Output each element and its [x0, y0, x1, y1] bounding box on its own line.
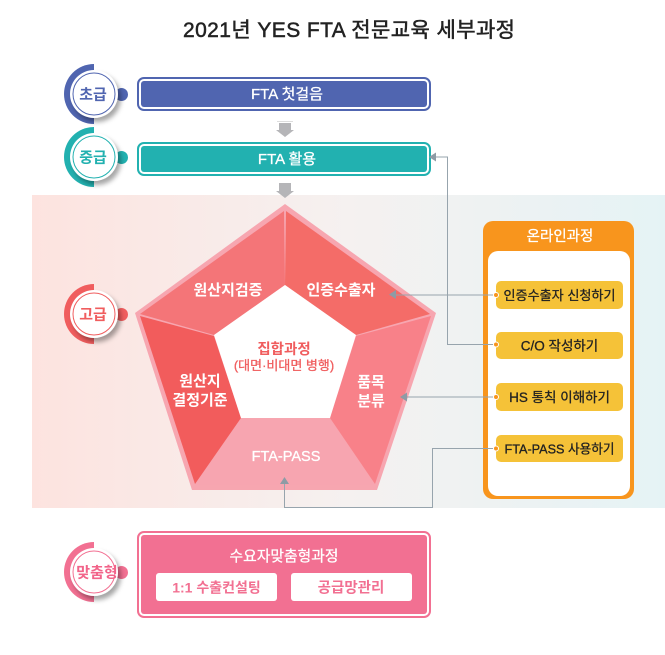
center: group course: 집합과정 [257, 341, 311, 358]
background band: advanced level [32, 195, 665, 508]
panel: online course: 온라인과정 [527, 228, 593, 245]
segment: origin criteria: 원산지 [179, 373, 221, 390]
item: apply approved exporter [496, 281, 623, 309]
badge: beginner [64, 64, 128, 124]
segment: item classification [330, 316, 431, 484]
bar: FTA first steps [138, 78, 430, 110]
bar: FTA application [138, 143, 430, 175]
button: supply chain management [291, 573, 412, 601]
item: write C/O: C/O 작성하기 [521, 338, 598, 354]
title: 2021년 YES FTA 전문교육 세부과정 [183, 19, 515, 42]
arrow: FTA-PASS use to segment [280, 446, 498, 508]
segment: origin verification [140, 211, 285, 335]
pentagon diagram [135, 204, 436, 490]
bar: FTA first steps: FTA 첫걸음 [251, 86, 323, 103]
arrow: C/O to FTA application [429, 152, 498, 347]
panel: customized course [138, 532, 430, 617]
arrow: beginner to intermediate [276, 121, 294, 137]
segment: item classification: 품목 [357, 374, 385, 391]
badge: intermediate: 중급 [79, 150, 107, 166]
badge: intermediate [64, 127, 128, 187]
segment: origin criteria: 결정기준 [172, 392, 228, 409]
item: understand HS [496, 383, 623, 411]
item: use FTA-PASS: FTA-PASS 사용하기 [504, 442, 614, 456]
badge: advanced [64, 284, 128, 344]
badge: advanced: 고급 [79, 306, 107, 324]
center: group course [214, 285, 356, 418]
item: write C/O [496, 332, 623, 359]
arrow: exporter application to segment [389, 290, 498, 299]
bar: FTA application: FTA 활용 [258, 151, 316, 168]
segment: origin verification: 원산지검증 [193, 282, 263, 299]
segment: FTA-PASS [195, 419, 375, 485]
arrow: HS to item classification [400, 392, 498, 402]
panel: customized course: 수요자맞춤형과정 [230, 548, 338, 565]
badge: customized [64, 542, 128, 602]
panel: online course [483, 221, 634, 499]
arrow: intermediate to advanced [276, 183, 294, 198]
segment: item classification: 분류 [357, 393, 385, 410]
segment: origin criteria [140, 316, 241, 484]
badge: customized: 맞춤형 [76, 564, 118, 582]
button: supply chain management: 공급망관리 [318, 580, 384, 596]
item: apply approved exporter: 인증수출자 신청하기 [504, 288, 616, 303]
item: understand HS: HS 통칙 이해하기 [509, 390, 610, 405]
button: 1:1 export consulting [156, 573, 277, 601]
button: 1:1 export consulting: 1:1 수출컨설팅 [172, 580, 261, 596]
segment: approved exporter [285, 211, 430, 335]
center: group course: (대면·비대면 병행) [234, 358, 334, 373]
badge: beginner: 초급 [79, 86, 107, 104]
segment: approved exporter: 인증수출자 [306, 282, 376, 299]
segment: FTA-PASS: FTA-PASS [252, 449, 320, 465]
item: use FTA-PASS [496, 435, 623, 462]
